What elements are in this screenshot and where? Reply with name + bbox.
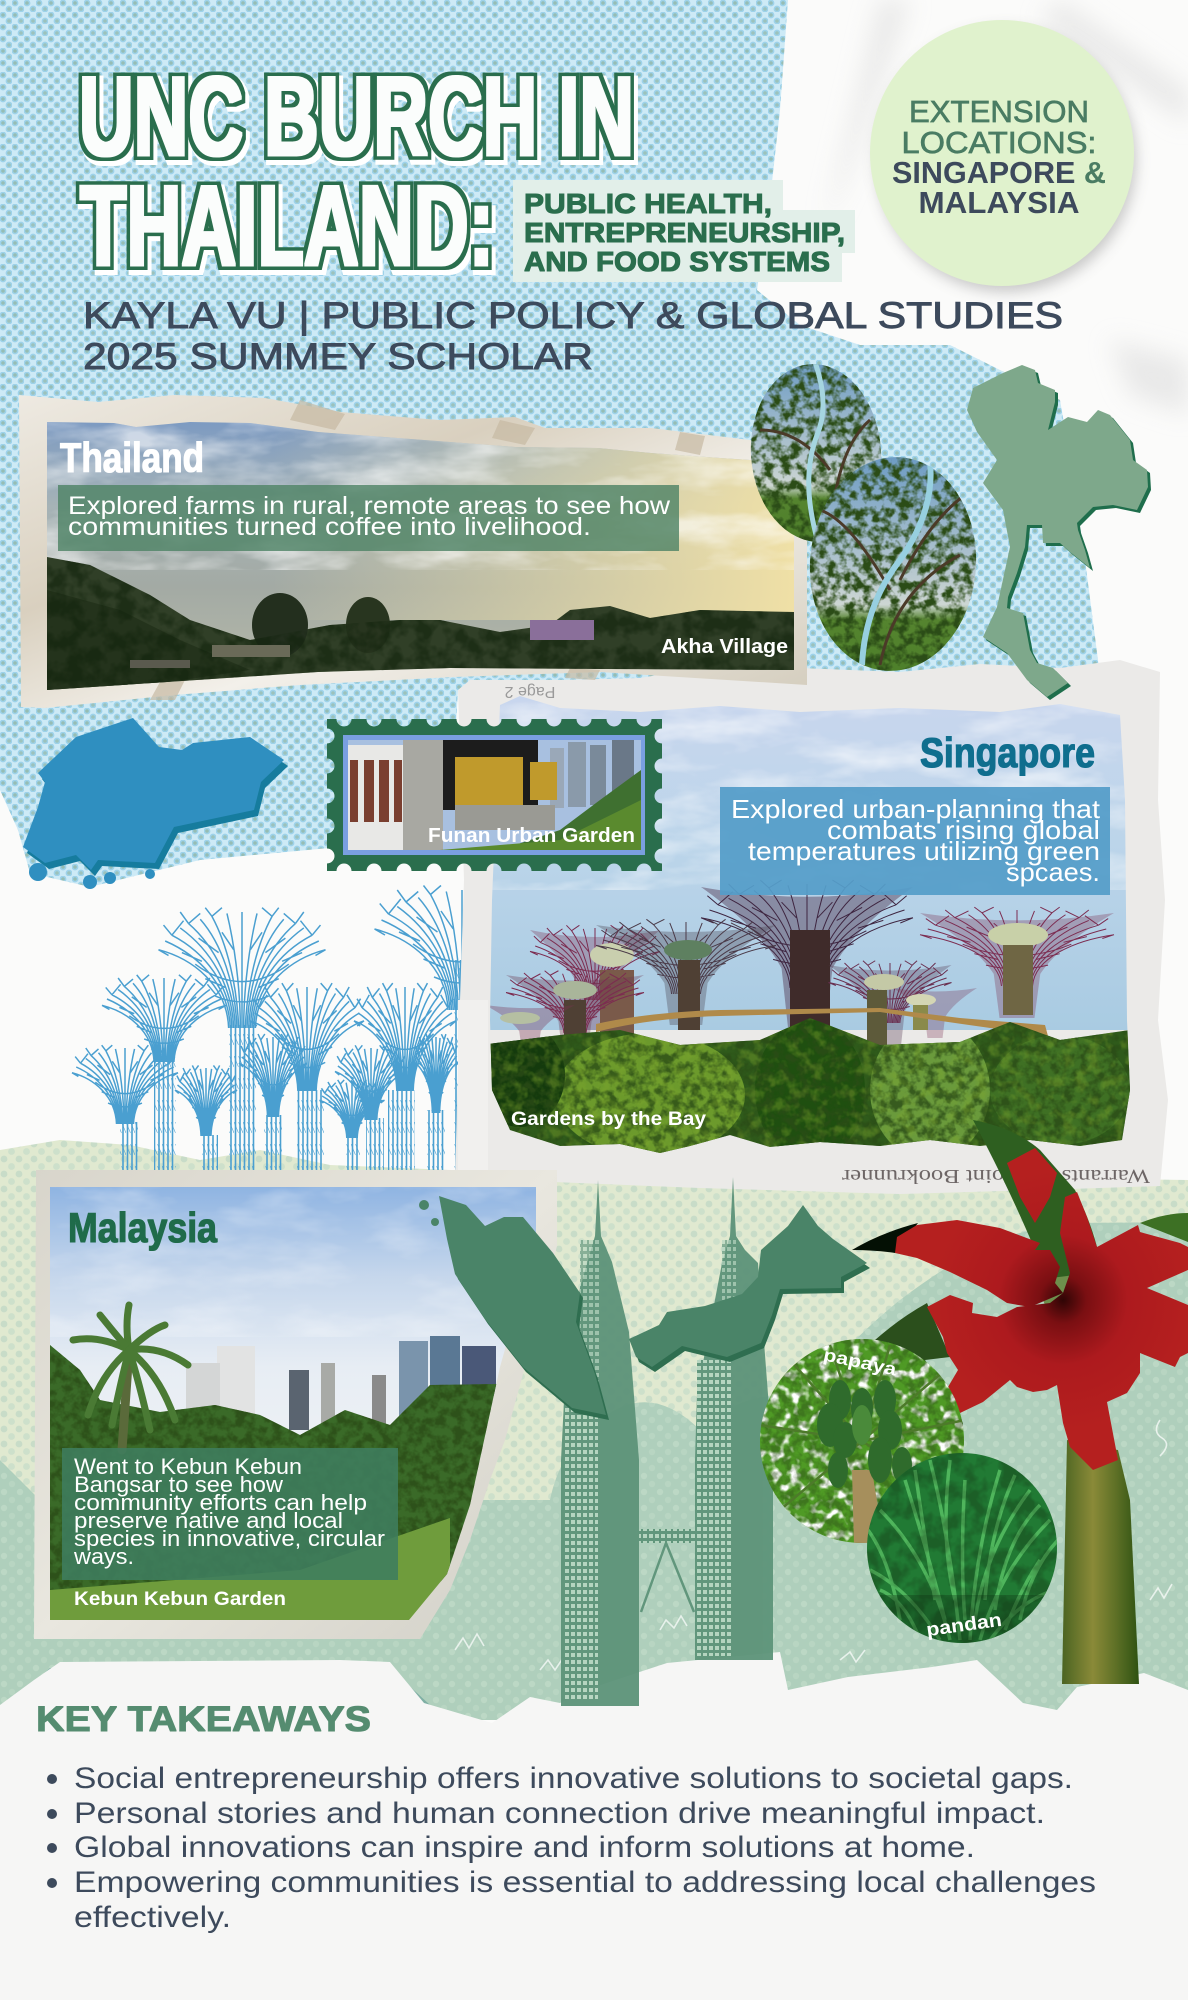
newsprint text: Page 2 (505, 683, 555, 700)
photo: Kebun Kebun Garden (50, 1187, 540, 1625)
text block: Malaysia description: species in innovative, circular (74, 1526, 385, 1551)
text block: Singapore description: Explored urban-planning that (731, 794, 1101, 824)
heading: Singapore: Singapore (920, 729, 1095, 776)
badge: extension locations: LOCATIONS: (902, 125, 1096, 160)
text block: Malaysia description: ways. (73, 1544, 134, 1569)
subtitle block (513, 180, 855, 282)
text block: Malaysia description: Bangsar to see how (74, 1472, 283, 1497)
text block: Singapore description: temperatures utilizing green (748, 836, 1100, 866)
text block: Malaysia description: community efforts can help (74, 1490, 367, 1515)
icon: coffee bean photo two (805, 455, 980, 675)
list: key takeaways: Personal stories and human connection drive meaningful impact. (74, 1797, 1045, 1830)
map: Malaysia (419, 1196, 870, 1420)
heading: Malaysia: Malaysia (68, 1204, 218, 1251)
photo circle: papaya (755, 1335, 970, 1550)
text block: Singapore description: combats rising global (827, 815, 1100, 845)
map: Thailand (967, 365, 1151, 700)
text block: Malaysia description (62, 1448, 398, 1580)
label: Gardens by the Bay: Gardens by the Bay (511, 1109, 706, 1130)
supertrees (485, 880, 1114, 1055)
label: Funan Urban Garden: Funan Urban Garden (428, 825, 635, 847)
badge: extension locations: MALAYSIA (918, 185, 1080, 220)
hills and village (47, 557, 794, 700)
city skyline (186, 1336, 496, 1436)
list: key takeaways (47, 1762, 1096, 1934)
panel: Singapore torn paper (455, 660, 1168, 1194)
label: Akha Village: Akha Village (661, 636, 788, 658)
heading: key takeaways: KEY TAKEAWAYS (36, 1700, 371, 1739)
list: key takeaways: Global innovations can inspire and inform solutions at home. (74, 1831, 975, 1864)
list: key takeaways: Social entrepreneurship offers innovative solutions to societal gaps. (74, 1762, 1073, 1795)
foliage (490, 1018, 1130, 1153)
panel: mint paper (0, 1222, 1188, 1720)
text block: Thailand description: Explored farms in rural, remote areas to see how (68, 492, 671, 520)
panel: blue halftone paper (0, 0, 1100, 887)
icon: coffee bean photo one (750, 364, 882, 542)
panel: pale green halftone paper (0, 1140, 1188, 1720)
illustration: Petronas towers (561, 1177, 773, 1706)
panel: Malaysia paper frame (34, 1170, 557, 1639)
subtitle block: ENTREPRENEURSHIP, (524, 217, 845, 248)
title (79, 54, 634, 290)
text block: Malaysia description: Went to Kebun Kebun (74, 1454, 302, 1479)
badge: extension locations: EXTENSION (909, 94, 1089, 129)
label: pandan: pandan (925, 1610, 1003, 1641)
panel: Thailand paper frame (19, 395, 807, 708)
badge: extension locations: SINGAPORE & (892, 155, 1106, 190)
panel: key takeaways torn paper (0, 1652, 1188, 2000)
subtitle block: PUBLIC HEALTH, (524, 188, 772, 219)
illustration: palm silhouette filled with hibiscus (852, 1120, 1188, 1684)
panel: Funan Urban Garden stamp (327, 719, 662, 871)
text block: Thailand description (58, 485, 679, 551)
text block: Thailand description: communities turned coffee into livelihood. (68, 513, 591, 541)
text block: Malaysia description: preserve native and local (74, 1508, 343, 1533)
palm trunk (1062, 1440, 1139, 1684)
text block: Singapore description (720, 787, 1110, 895)
label: papaya: papaya (822, 1345, 899, 1380)
byline: KAYLA VU | PUBLIC POLICY & GLOBAL STUDIES (83, 295, 1063, 336)
subtitle block: AND FOOD SYSTEMS (524, 246, 830, 277)
coconut palm (73, 1305, 188, 1450)
byline: 2025 SUMMEY SCHOLAR (83, 336, 593, 377)
newsprint strip text: Warrants and Joint Bookrunner (842, 1165, 1150, 1187)
photo: Gardens by the Bay (475, 690, 1140, 1165)
photo: Akha Village (47, 420, 797, 700)
photo circle: pandan (862, 1450, 1062, 1650)
illustration: blue supertree line art (72, 886, 550, 1170)
label: Kebun Kebun Garden: Kebun Kebun Garden (74, 1589, 286, 1610)
map: Singapore (23, 718, 288, 889)
elevated walkway (596, 1008, 1048, 1036)
title: THAILAND: (80, 163, 494, 290)
trees and grass (50, 1345, 496, 1590)
badge: extension locations (870, 20, 1136, 292)
text block: Singapore description: spcaes. (1006, 857, 1100, 887)
list: key takeaways: Empowering communities is essential to addressing local challenges (74, 1866, 1096, 1899)
title: UNC BURCH IN (79, 54, 634, 179)
list: key takeaways: effectively. (74, 1901, 231, 1934)
heading: Thailand: Thailand (60, 434, 204, 481)
byline (83, 295, 1063, 377)
